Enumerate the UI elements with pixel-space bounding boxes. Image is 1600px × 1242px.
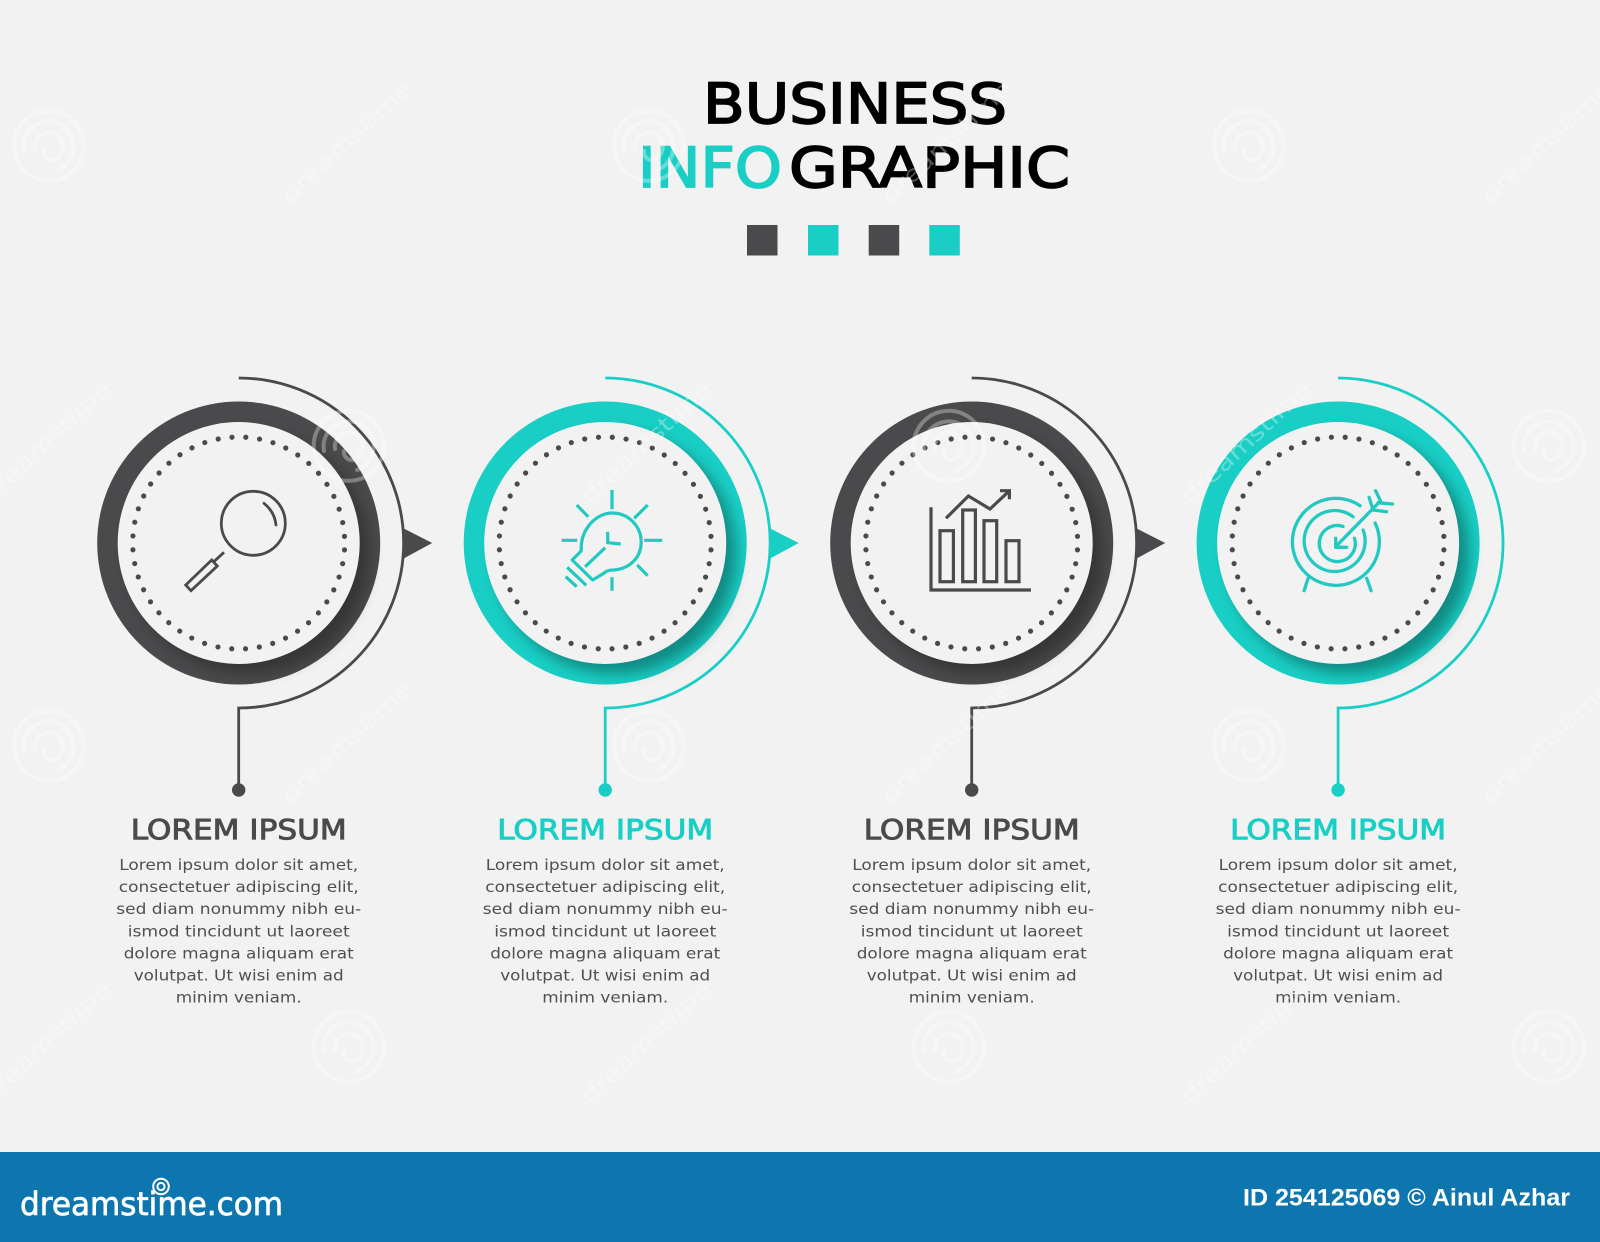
step 2 body text: sed diam nonummy nibh eu- xyxy=(483,900,728,918)
step 1 body text: ismod tincidunt ut laoreet xyxy=(128,922,350,940)
step 4 body text: volutpat. Ut wisi enim ad xyxy=(1233,966,1443,984)
step 4 body text: ismod tincidunt ut laoreet xyxy=(1227,922,1449,940)
step 2 connector arc and stem xyxy=(605,378,770,790)
step 1 arrow xyxy=(403,528,432,559)
step 4: teal target xyxy=(1197,378,1503,1006)
step 1 body text xyxy=(116,856,361,1006)
step 4 body text: consectetuer adipiscing elit, xyxy=(1218,878,1458,896)
step 3 body text xyxy=(849,856,1094,1006)
step 3 dotted ring xyxy=(866,437,1078,649)
watermark overlay: dreamstime xyxy=(277,77,417,209)
step 3: dark chart xyxy=(830,378,1165,1006)
step 1 body text: volutpat. Ut wisi enim ad xyxy=(134,966,344,984)
step 3 body text: Lorem ipsum dolor sit amet, xyxy=(852,856,1091,874)
step 2 body text: minim veniam. xyxy=(542,988,668,1006)
step 3 heading: LOREM IPSUM xyxy=(864,814,1080,846)
step 3 body text: volutpat. Ut wisi enim ad xyxy=(867,966,1077,984)
step 1 body text: sed diam nonummy nibh eu- xyxy=(116,900,361,918)
step 3 body text: consectetuer adipiscing elit, xyxy=(852,878,1092,896)
watermark overlay: dreamstime xyxy=(577,377,717,509)
step 2 body text: ismod tincidunt ut laoreet xyxy=(494,922,716,940)
watermark overlay: dreamstime xyxy=(1177,377,1317,509)
watermark overlay: dreamstime xyxy=(877,77,1017,209)
step 4 shadow xyxy=(1227,432,1469,674)
watermark overlay: dreamstime xyxy=(277,677,417,809)
icon: light bulb xyxy=(562,490,662,591)
step 1 connector arc and stem xyxy=(239,378,404,790)
step 1 body text: dolore magna aliquam erat xyxy=(124,944,354,962)
step 4 body text: minim veniam. xyxy=(1275,988,1401,1006)
step 3 stem dot xyxy=(965,783,978,797)
step 4 body text: sed diam nonummy nibh eu- xyxy=(1216,900,1461,918)
step 1 shadow xyxy=(128,432,370,674)
step 4 dotted ring xyxy=(1232,437,1444,649)
step 1 body text: minim veniam. xyxy=(176,988,302,1006)
icon: magnifying glass xyxy=(186,491,285,591)
step 1 heading: LOREM IPSUM xyxy=(131,814,347,846)
step 3 body text: minim veniam. xyxy=(909,988,1035,1006)
step 2 body text: Lorem ipsum dolor sit amet, xyxy=(486,856,725,874)
watermark overlay: dreamstime xyxy=(577,977,717,1109)
footer logo spiral xyxy=(153,1179,169,1194)
step 1 body text: Lorem ipsum dolor sit amet, xyxy=(119,856,358,874)
step 1 inner disc xyxy=(118,422,360,664)
step 2 body text: consectetuer adipiscing elit, xyxy=(485,878,725,896)
step 3 body text: sed diam nonummy nibh eu- xyxy=(849,900,1094,918)
step 4 body text: Lorem ipsum dolor sit amet, xyxy=(1219,856,1458,874)
step 1 body text: consectetuer adipiscing elit, xyxy=(119,878,359,896)
step 3 connector arc and stem xyxy=(972,378,1137,790)
title: GRAPHIC xyxy=(789,136,1070,200)
step 1: dark magnifier xyxy=(97,378,432,1006)
step 2 stem dot xyxy=(598,783,612,797)
watermark overlay: dreamstime xyxy=(1477,77,1600,209)
step 2 dotted ring xyxy=(499,437,711,649)
step 2 body text xyxy=(483,856,728,1006)
step 4 stem dot xyxy=(1331,783,1345,797)
step 2 inner disc xyxy=(484,422,726,664)
step 3 inner disc xyxy=(851,422,1093,664)
step 1 ring xyxy=(97,402,380,684)
step 3 arrow xyxy=(1136,528,1165,559)
title xyxy=(638,72,1070,200)
step 3 ring xyxy=(830,402,1113,684)
step 1 dotted ring xyxy=(133,437,345,649)
step 4 ring xyxy=(1197,402,1480,684)
step 2 arrow xyxy=(769,528,799,559)
step 3 shadow xyxy=(861,432,1103,674)
step 2 ring xyxy=(464,402,747,684)
step 4 inner disc xyxy=(1217,422,1459,664)
watermark overlay: dreamstime xyxy=(1477,677,1600,809)
step 4 heading: LOREM IPSUM xyxy=(1230,814,1446,846)
step 4 connector arc and stem xyxy=(1338,378,1503,790)
step 4 body text xyxy=(1216,856,1461,1006)
icon: target with arrow xyxy=(1292,491,1393,591)
step 4 body text: dolore magna aliquam erat xyxy=(1223,944,1453,962)
step 3 body text: dolore magna aliquam erat xyxy=(857,944,1087,962)
icon: bar chart with arrow xyxy=(931,491,1031,590)
watermark overlay: dreamstime xyxy=(1177,977,1317,1109)
footer credit: ID 254125069 © Ainul Azhar xyxy=(1243,1184,1570,1212)
footer bar xyxy=(0,1152,1600,1242)
title: INFO xyxy=(638,136,782,200)
step 2 body text: dolore magna aliquam erat xyxy=(490,944,720,962)
step 2 heading: LOREM IPSUM xyxy=(497,814,713,846)
step 3 body text: ismod tincidunt ut laoreet xyxy=(861,922,1083,940)
watermark overlay: dreamstime xyxy=(877,677,1017,809)
step 2 shadow xyxy=(494,432,736,674)
step 2 body text: volutpat. Ut wisi enim ad xyxy=(500,966,710,984)
step 2: teal light bulb xyxy=(464,378,799,1006)
footer logo text: dreamstime.com xyxy=(20,1185,283,1223)
title: BUSINESS xyxy=(703,72,1007,136)
step 1 stem dot xyxy=(232,783,245,797)
title decoration squares xyxy=(747,225,960,256)
